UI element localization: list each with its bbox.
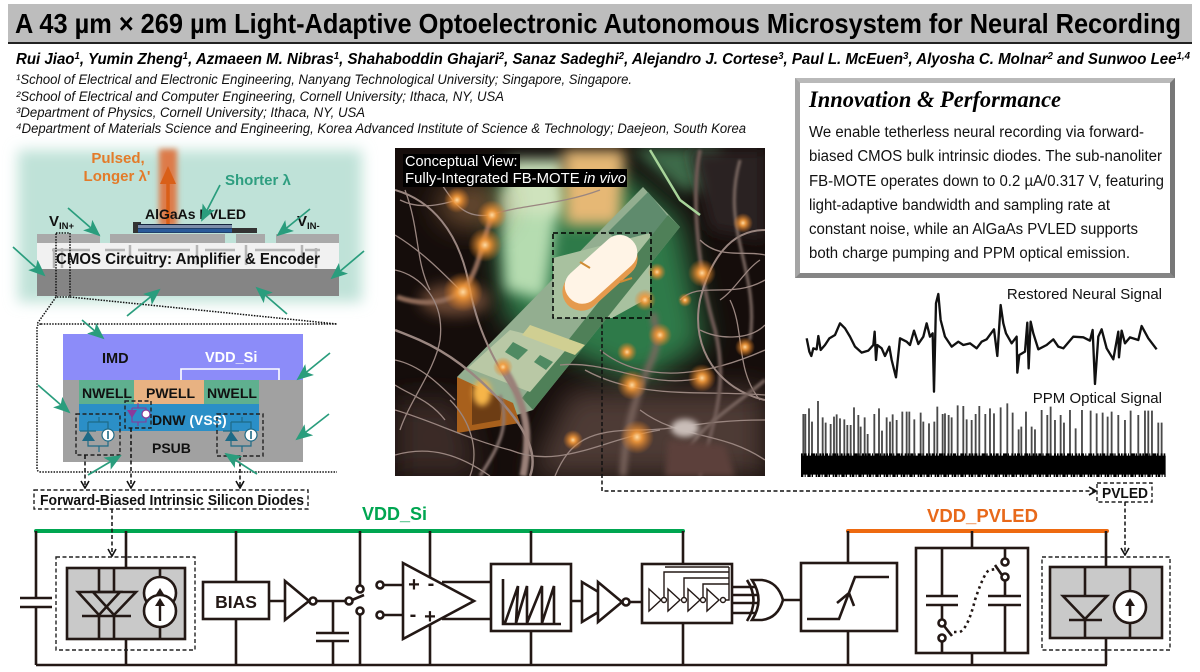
- image caption: Fully-Integrated FB-MOTE in vivo: [405, 171, 626, 187]
- device body: [457, 187, 680, 433]
- arrow into diode block: [111, 509, 113, 556]
- authors: 2: [498, 51, 505, 62]
- teal light glow: [18, 150, 362, 302]
- authors: 1: [183, 51, 188, 62]
- substrate and wells: NWELL: [82, 385, 132, 401]
- chip layers: [37, 234, 339, 296]
- panel: device cross-section: [18, 149, 362, 324]
- chart: PPM optical signal: PPM Optical Signal: [1033, 390, 1162, 407]
- substrate and wells: DNW (VSS): [152, 412, 227, 428]
- panel: innovation and performance: constant noise, while an AlGaAs PVLED supports: [809, 221, 1138, 238]
- optical labels: Longer λ': [84, 168, 150, 185]
- optical labels: Pulsed,: [91, 150, 145, 167]
- component labels: V: [49, 213, 59, 230]
- dashed diode boxes: [76, 401, 263, 456]
- authors: , Alyosha C. Molnar: [907, 51, 1048, 68]
- component labels: V: [297, 213, 307, 230]
- authors: 1: [334, 51, 340, 62]
- foreground blurred neuron: [665, 419, 735, 476]
- affiliations: ¹School of Electrical and Electronic Engineering, Nanyang Technological University; Singapore, Singapore.: [16, 72, 632, 87]
- BIAS block: BIAS: [215, 592, 257, 612]
- buffer: [582, 582, 649, 622]
- authors: Rui Jiao: [16, 51, 76, 68]
- dotted frame: [37, 324, 337, 472]
- component labels: [49, 206, 320, 268]
- diode middle: [127, 403, 150, 426]
- substrate and wells: NWELL: [207, 385, 257, 401]
- amplifier: -: [410, 604, 416, 626]
- authors: , Paul L. McEuen: [783, 51, 903, 68]
- sawtooth block: [491, 531, 582, 665]
- dashed arrows to label: [85, 428, 240, 488]
- conceptual image panel: [395, 148, 765, 476]
- intrinsic diode block: [56, 531, 195, 665]
- power rails: [36, 531, 1107, 665]
- orange emission beam: [159, 149, 177, 227]
- affiliations: ³Department of Physics, Cornell University; Ithaca, NY, USA: [16, 105, 365, 120]
- panel: innovation and performance: FB-MOTE operates down to 0.2 µA/0.317 V, featuring: [809, 173, 1164, 190]
- affiliations: ⁴Department of Materials Science and Engineering, Korea Advanced Institute of Science & Technology; Daejeon, South Korea: [16, 121, 746, 136]
- panel: innovation and performance: [795, 78, 1175, 278]
- IMD layer: [63, 334, 303, 382]
- image caption: Conceptual View:: [405, 154, 518, 170]
- diode left: [80, 417, 114, 452]
- affiliations: ²School of Electrical and Computer Engineering, Cornell University; Ithaca, NY, USA: [16, 89, 504, 104]
- BIAS block: [203, 531, 285, 665]
- authors: 2: [1046, 51, 1053, 62]
- panel: innovation and performance: biased CMOS bulk intrinsic diodes. The sub-nanoliter: [809, 148, 1162, 165]
- chart: PPM optical signal: [801, 390, 1166, 476]
- rail labels: VDD_Si: [362, 503, 427, 524]
- IMD layer: IMD: [102, 351, 129, 367]
- XOR gate: [732, 580, 801, 621]
- affiliations: [16, 72, 746, 136]
- diode right: [223, 417, 257, 452]
- background glows: [395, 148, 765, 476]
- amplifier: [403, 531, 491, 665]
- IMD layer: VDD_Si: [205, 350, 257, 366]
- orange synapse glows: [443, 187, 755, 454]
- authors: , Azmaeen M. Nibras: [187, 51, 334, 68]
- authors: , Yumin Zheng: [79, 51, 183, 68]
- inverter and sampling switch: [285, 531, 403, 665]
- optical labels: [84, 150, 292, 189]
- component labels: IN+: [59, 221, 75, 232]
- zoom callout lines: [37, 233, 337, 324]
- panel: innovation and performance: Innovation & Performance: [808, 87, 1061, 112]
- glowing LED capsule: [562, 234, 638, 311]
- panel: bulk diode cross-section: [34, 324, 337, 509]
- ring oscillator delay line: [642, 531, 732, 665]
- authors: and Sunwoo Lee: [1053, 51, 1177, 68]
- forward-biased diode label: Forward-Biased Intrinsic Silicon Diodes: [40, 493, 304, 509]
- rail labels: VDD_PVLED: [927, 505, 1038, 526]
- authors: , Shahaboddin Ghajari: [338, 51, 499, 68]
- authors: 1: [75, 51, 80, 62]
- amplifier: -: [428, 573, 434, 595]
- rail labels: [362, 503, 1038, 526]
- component labels: AlGaAs PVLED: [145, 206, 246, 222]
- amplifier: +: [408, 574, 420, 596]
- amplifier: +: [424, 606, 436, 628]
- dashed region and link to PVLED: [553, 233, 1096, 491]
- substrate and wells: PSUB: [152, 440, 191, 456]
- PVLED stack: [116, 222, 257, 233]
- panel: innovation and performance: both charge pumping and PPM optical emission.: [809, 245, 1130, 262]
- substrate and wells: PWELL: [146, 385, 195, 401]
- image caption: [403, 154, 627, 187]
- PVLED block: [1042, 531, 1170, 665]
- Schmitt trigger block: [801, 531, 897, 665]
- circuit schematic: [20, 483, 1170, 665]
- authors: , Sanaz Sadeghi: [503, 51, 619, 68]
- supply capacitor: [20, 531, 52, 665]
- component labels: IN-: [307, 221, 320, 232]
- authors: 3: [903, 51, 909, 62]
- component labels: CMOS Circuitry: Amplifier & Encoder: [56, 251, 320, 268]
- panel: innovation and performance: light-adaptive bandwidth and sampling rate at: [809, 197, 1111, 214]
- neuron fibres: [395, 150, 765, 476]
- authors: 3: [778, 51, 784, 62]
- authors: , Alejandro J. Cortese: [623, 51, 779, 68]
- substrate and wells: [63, 380, 303, 462]
- charge pump block: [916, 531, 1028, 665]
- optical labels: Shorter λ: [225, 172, 292, 189]
- authors: 2: [618, 51, 625, 62]
- chart: restored neural signal: Restored Neural Signal: [1007, 286, 1162, 303]
- authors: 1,4: [1177, 51, 1190, 62]
- chart: restored neural signal: [807, 286, 1162, 392]
- panel: innovation and performance: We enable tetherless neural recording via forward-: [809, 124, 1144, 141]
- green light arrows: [13, 185, 364, 475]
- PVLED tag: PVLED: [1102, 485, 1148, 502]
- PVLED tag: [1097, 483, 1152, 555]
